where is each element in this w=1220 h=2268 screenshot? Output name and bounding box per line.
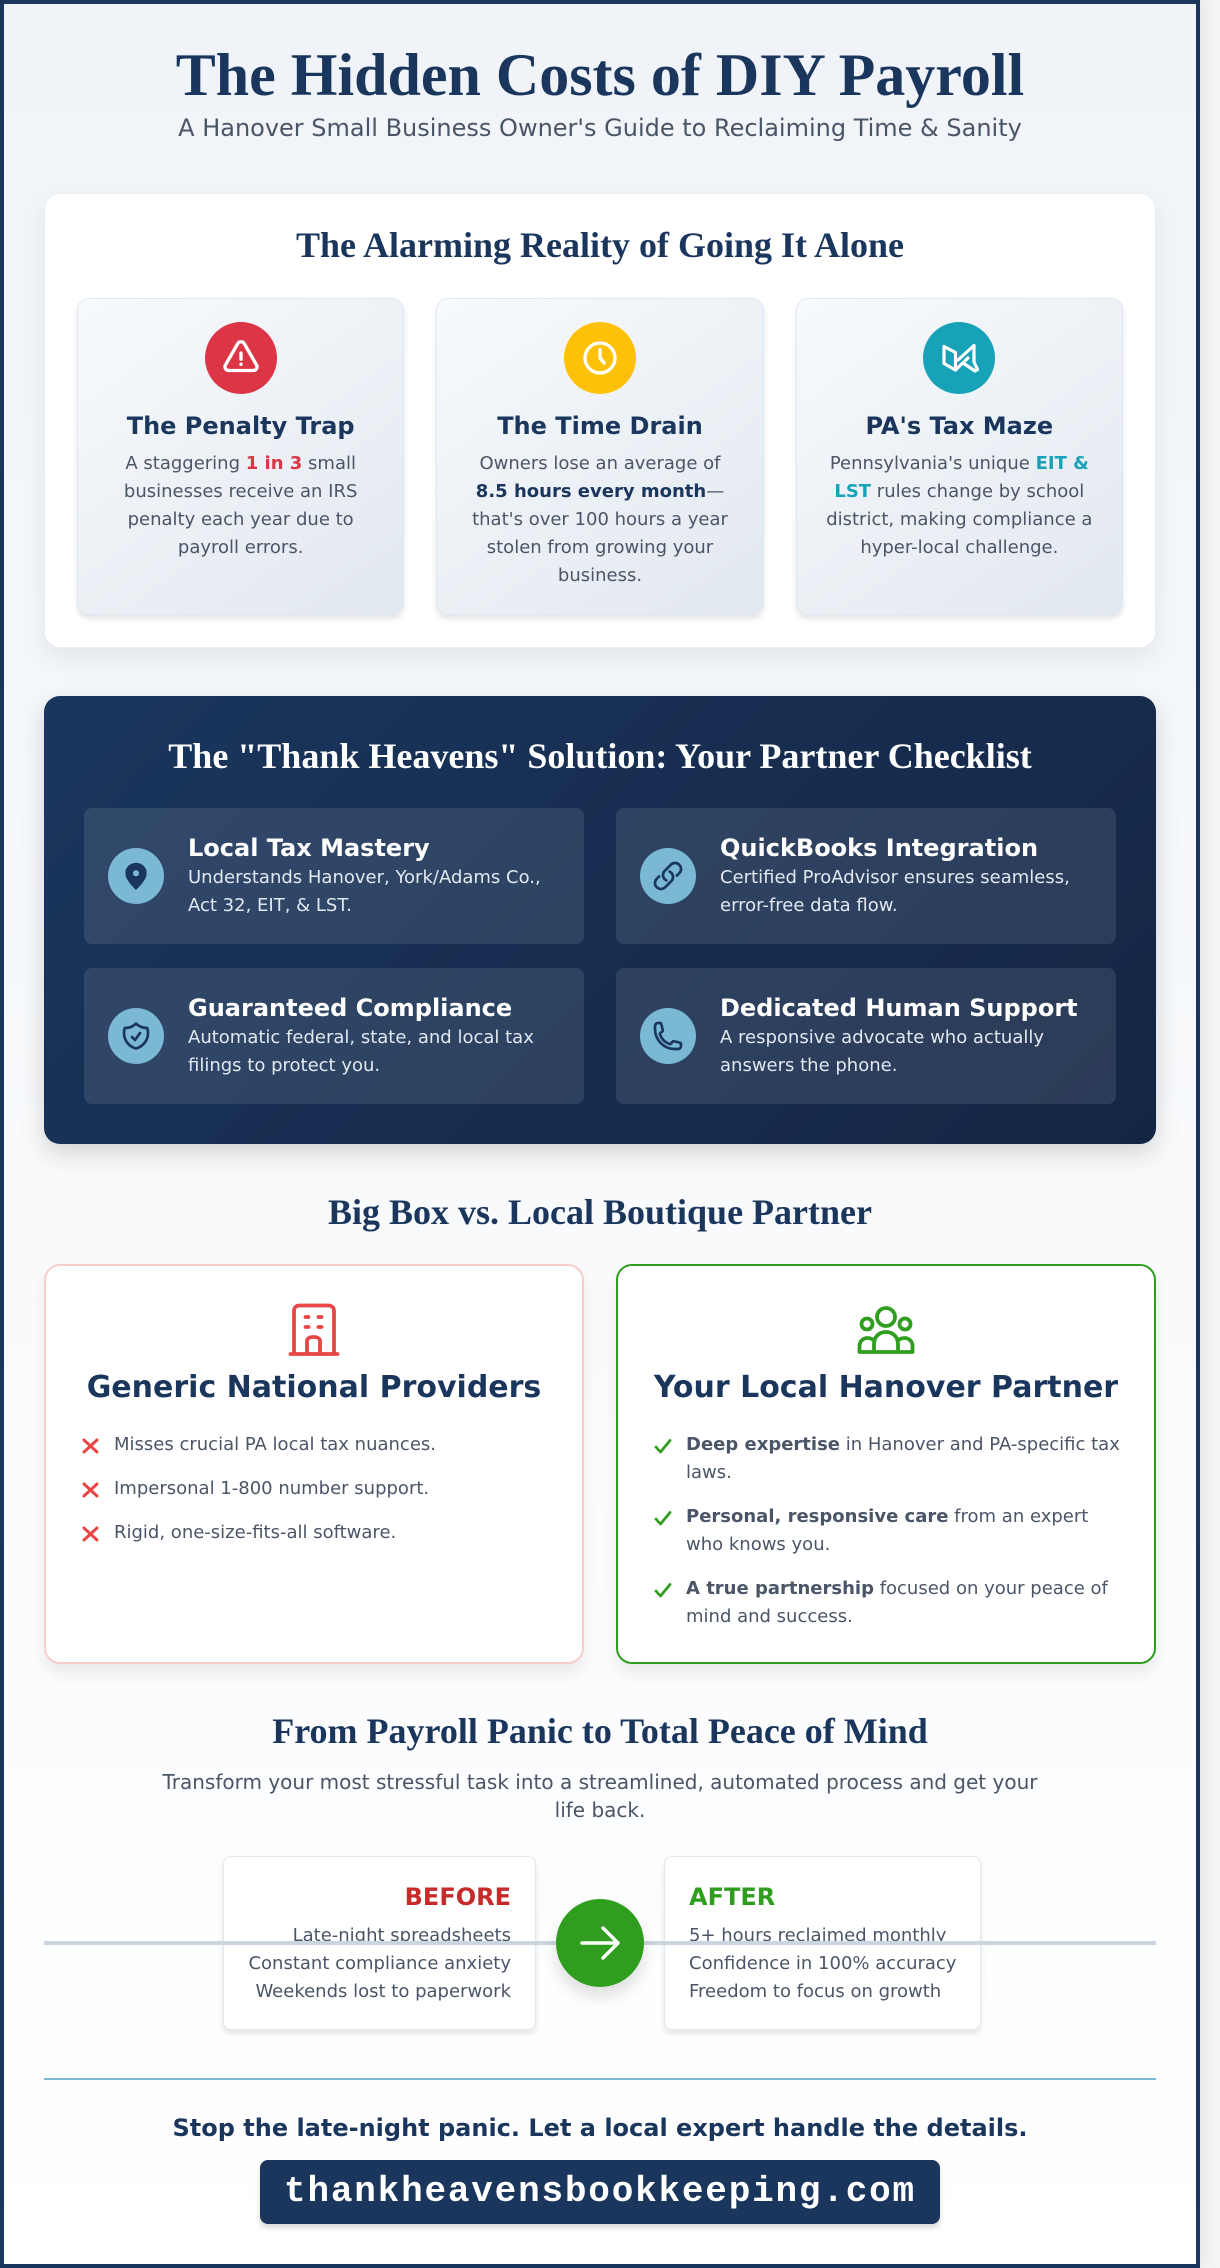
item text: Rigid, one-size-fits-all software. bbox=[114, 1522, 396, 1543]
item text: filings to protect you. bbox=[188, 1055, 380, 1076]
heading: panic to peace: From Payroll Panic to Total Peace of Mind bbox=[272, 1711, 928, 1751]
icon: map pin bbox=[108, 848, 164, 904]
icon: clock bbox=[564, 322, 636, 394]
list: partner benefits bbox=[654, 1434, 1120, 1627]
card: after bbox=[664, 1856, 981, 2030]
item text: mind and success. bbox=[686, 1606, 853, 1627]
item: local tax mastery bbox=[84, 808, 584, 944]
after list: Confidence in 100% accuracy bbox=[689, 1953, 956, 1974]
item text: Personal, responsive care from an expert bbox=[686, 1506, 1088, 1527]
heading: big box vs local: Big Box vs. Local Boutique Partner bbox=[328, 1192, 872, 1232]
card text: hyper-local challenge. bbox=[860, 537, 1058, 558]
website address bbox=[260, 2160, 940, 2224]
card text: 8.5 hours every month— bbox=[476, 481, 724, 502]
heading: partner checklist: The "Thank Heavens" Solution: Your Partner Checklist bbox=[168, 736, 1032, 776]
item heading: QuickBooks Integration bbox=[720, 834, 1038, 862]
card text bbox=[472, 453, 728, 586]
after list bbox=[689, 1925, 956, 2002]
item text: A true partnership focused on your peace of bbox=[686, 1578, 1108, 1599]
icon: group of people bbox=[858, 1306, 914, 1354]
item heading: Local Tax Mastery bbox=[188, 834, 430, 862]
icon: check mark bbox=[654, 1439, 672, 1454]
intro text bbox=[162, 1770, 1038, 1822]
item: 1-800 support bbox=[82, 1478, 429, 1499]
intro text: Transform your most stressful task into a streamlined, automated process and get your bbox=[162, 1770, 1037, 1794]
panel: local hanover partner bbox=[616, 1264, 1156, 1664]
item text bbox=[720, 867, 1070, 916]
card text: payroll errors. bbox=[178, 537, 303, 558]
icon: phone bbox=[640, 1008, 696, 1064]
call to action: Stop the late-night panic. Let a local expert handle the details. bbox=[172, 2114, 1028, 2142]
timeline line bbox=[44, 1941, 1156, 1945]
before list bbox=[248, 1925, 511, 2002]
item text: Deep expertise in Hanover and PA-specific tax bbox=[686, 1434, 1120, 1455]
title: The Hidden Costs of DIY Payroll bbox=[176, 42, 1024, 108]
card text: A staggering 1 in 3 small bbox=[125, 453, 356, 474]
card text: stolen from growing your bbox=[487, 537, 713, 558]
panel: partner checklist bbox=[44, 696, 1156, 1144]
card text: penalty each year due to bbox=[128, 509, 354, 530]
item: deep expertise bbox=[654, 1434, 1120, 1483]
icon: warning triangle bbox=[205, 322, 277, 394]
icon: map bbox=[923, 322, 995, 394]
panel heading: Generic National Providers bbox=[87, 1370, 541, 1405]
icon: arrow circle bbox=[556, 1899, 644, 1987]
item text: Act 32, EIT, & LST. bbox=[188, 895, 352, 916]
before list: Weekends lost to paperwork bbox=[255, 1981, 511, 2002]
card text: Owners lose an average of bbox=[480, 453, 720, 474]
after list: Freedom to focus on growth bbox=[689, 1981, 941, 2002]
panel: alarming reality bbox=[44, 193, 1156, 648]
panel heading: Your Local Hanover Partner bbox=[654, 1370, 1118, 1405]
list: provider drawbacks bbox=[82, 1434, 436, 1543]
item: local tax nuances bbox=[82, 1434, 436, 1455]
item heading: Dedicated Human Support bbox=[720, 994, 1078, 1022]
card: PA's tax maze bbox=[796, 298, 1123, 615]
card text: LST rules change by school bbox=[834, 481, 1084, 502]
card: the penalty trap bbox=[77, 298, 404, 615]
item text bbox=[686, 1578, 1108, 1627]
item text bbox=[686, 1506, 1088, 1555]
item text: answers the phone. bbox=[720, 1055, 897, 1076]
divider rule bbox=[44, 2078, 1156, 2080]
heading: alarming reality: The Alarming Reality of Going It Alone bbox=[296, 225, 904, 265]
icon: check mark bbox=[654, 1511, 672, 1526]
icon: check mark bbox=[654, 1583, 672, 1598]
icon: link bbox=[640, 848, 696, 904]
card heading: The Time Drain bbox=[497, 412, 703, 440]
card heading: PA's Tax Maze bbox=[866, 412, 1053, 440]
after label: AFTER bbox=[689, 1883, 775, 1911]
icon: shield check bbox=[108, 1008, 164, 1064]
item text bbox=[720, 1027, 1044, 1076]
icon: x mark bbox=[82, 1438, 99, 1454]
item text: Impersonal 1-800 number support. bbox=[114, 1478, 429, 1499]
icon: office building bbox=[288, 1304, 340, 1356]
intro text: life back. bbox=[555, 1798, 645, 1822]
after list: 5+ hours reclaimed monthly bbox=[689, 1925, 946, 1946]
website address: thankheavensbookkeeping.com bbox=[284, 2171, 916, 2212]
card text: district, making compliance a bbox=[826, 509, 1092, 530]
item text bbox=[188, 1027, 534, 1076]
card heading: The Penalty Trap bbox=[127, 412, 355, 440]
before list: Late-night spreadsheets bbox=[293, 1925, 511, 1946]
item: rigid software bbox=[82, 1522, 396, 1543]
card: the time drain bbox=[436, 298, 764, 615]
item heading: Guaranteed Compliance bbox=[188, 994, 512, 1022]
icon: x mark bbox=[82, 1526, 99, 1542]
panel: generic national providers bbox=[44, 1264, 584, 1664]
item text: who knows you. bbox=[686, 1534, 830, 1555]
item text: A responsive advocate who actually bbox=[720, 1027, 1044, 1048]
card text: that's over 100 hours a year bbox=[472, 509, 728, 530]
item: true partnership bbox=[654, 1578, 1108, 1627]
item: guaranteed compliance bbox=[84, 968, 584, 1104]
item text: Certified ProAdvisor ensures seamless, bbox=[720, 867, 1070, 888]
subtitle: A Hanover Small Business Owner's Guide to Reclaiming Time & Sanity bbox=[178, 114, 1022, 142]
before label: BEFORE bbox=[405, 1883, 511, 1911]
item: quickbooks integration bbox=[616, 808, 1116, 944]
item text: Misses crucial PA local tax nuances. bbox=[114, 1434, 436, 1455]
item text: Understands Hanover, York/Adams Co., bbox=[188, 867, 541, 888]
icon: x mark bbox=[82, 1482, 99, 1498]
item text bbox=[686, 1434, 1120, 1483]
item text: error-free data flow. bbox=[720, 895, 898, 916]
item: personal care bbox=[654, 1506, 1088, 1555]
card text: Pennsylvania's unique EIT & bbox=[830, 453, 1089, 474]
card text: businesses receive an IRS bbox=[124, 481, 357, 502]
card text bbox=[124, 453, 357, 558]
card: before bbox=[223, 1856, 536, 2030]
item: dedicated human support bbox=[616, 968, 1116, 1104]
card text: business. bbox=[558, 565, 642, 586]
item text bbox=[188, 867, 541, 916]
card text bbox=[826, 453, 1092, 558]
item text: laws. bbox=[686, 1462, 732, 1483]
item text: Automatic federal, state, and local tax bbox=[188, 1027, 534, 1048]
before list: Constant compliance anxiety bbox=[248, 1953, 511, 1974]
